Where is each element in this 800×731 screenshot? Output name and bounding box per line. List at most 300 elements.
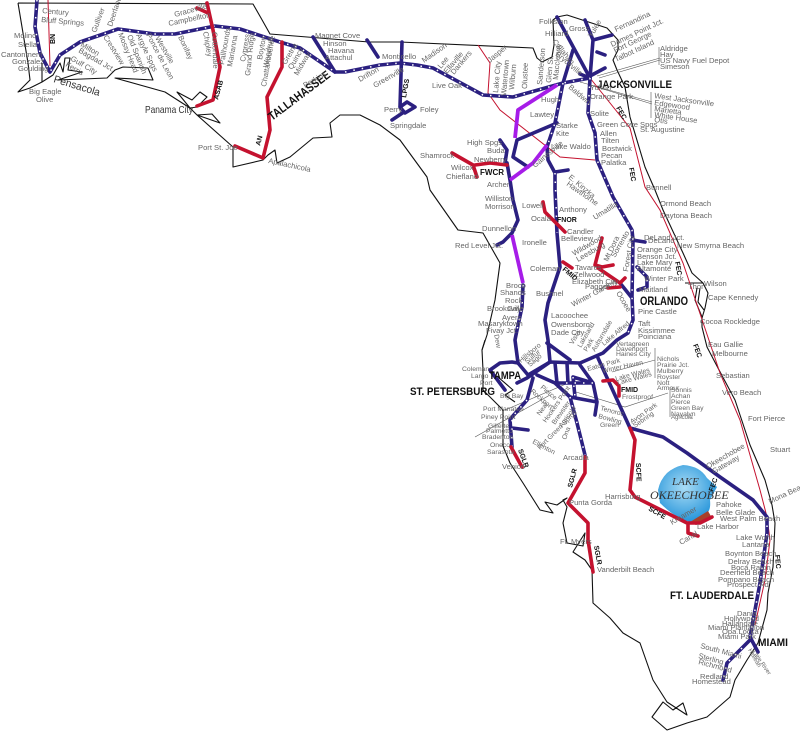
railroad line codes (50, 34, 781, 569)
central and east coast station labels: Forest City (621, 234, 636, 272)
north florida station labels: Lake Waldo (551, 142, 591, 151)
tampa area station labels: Rockport (529, 388, 554, 411)
central and east coast station labels: Elizabeth City (572, 277, 619, 286)
central and east coast station labels: Sorrento (609, 229, 631, 259)
north florida station labels: Sanderson (535, 48, 547, 85)
central and east coast station labels: Lake Harbor (697, 522, 739, 531)
panhandle station labels: Hinson (323, 39, 347, 48)
north florida station labels: Owensboro (551, 320, 590, 329)
tampa area station labels: Sago (527, 353, 544, 369)
tampa area station labels: Lake Alfred (601, 320, 632, 348)
north florida station labels: Olustee (520, 63, 530, 89)
tampa area station labels: Sulfur (524, 348, 542, 366)
central and east coast station labels: Pagget (585, 282, 610, 291)
central and east coast station labels: Bunnell (646, 183, 672, 192)
north florida station labels: Fernandina (613, 9, 652, 34)
railroad line codes: SCFE (634, 463, 642, 482)
north florida station labels: Lacoochee (551, 311, 588, 320)
north florida station labels: Ironelle (522, 238, 547, 247)
central and east coast station labels: Pine Castle (638, 307, 677, 316)
north florida station labels: Ellaville (442, 50, 465, 75)
north florida station labels: Broco (506, 281, 526, 290)
north florida station labels: Pecan (601, 151, 623, 160)
tampa area station labels: Achan (671, 393, 690, 400)
railroad line codes: FMID (561, 266, 578, 283)
central and east coast station labels: Gateway (710, 453, 741, 476)
panhandle station labels: Port St. Joe (198, 143, 238, 152)
central and east coast station labels: Cape Kennedy (708, 293, 758, 302)
central and east coast station labels: Cocoa Rockledge (700, 317, 760, 326)
tampa area station labels: Vertagreen (616, 341, 649, 348)
secondary city labels: Panama City (145, 104, 194, 116)
north florida station labels: Baldwin (567, 83, 593, 107)
central and east coast station labels: Prospect Rd (727, 580, 769, 589)
tampa area station labels: Sebring (632, 410, 656, 430)
panhandle station labels: Milton (79, 40, 101, 58)
north florida station labels: Lake City (491, 61, 503, 93)
central and east coast station labels: Belle Glade (716, 508, 755, 517)
central and east coast station labels: Kreamer (668, 504, 699, 527)
lake okeechobee label: LAKE (671, 476, 699, 488)
central and east coast station labels: Boynton Beach (725, 549, 777, 558)
panhandle station labels: Attachul (325, 53, 353, 62)
central and east coast station labels: Dania (737, 609, 758, 618)
tampa area station labels: Winter Haven (602, 360, 644, 375)
central and east coast station labels: Zellwood (574, 270, 604, 279)
aldridge and west jacksonville label lists: Aldridge (660, 44, 688, 53)
tampa area station labels: Ona (561, 426, 572, 441)
lake okeechobee (658, 465, 717, 522)
north florida station labels: Bryceville (554, 50, 584, 77)
central and east coast station labels: Winter Park (644, 274, 684, 283)
north florida station labels: Talbot Island (613, 38, 655, 64)
north florida station labels: Dunnellon (482, 224, 516, 233)
lake okeechobee label (650, 476, 729, 502)
tampa area station labels: Green Bay (671, 405, 704, 412)
north florida station labels: Fort George (612, 29, 653, 55)
tampa area station labels: Ellenton (531, 439, 556, 456)
panhandle station labels: Crestview (101, 33, 127, 67)
tampa area station labels: Agricola (558, 405, 578, 429)
north florida station labels: Allen (600, 129, 617, 138)
central and east coast station labels: Hialeah (746, 648, 762, 669)
north florida station labels: Archer (487, 180, 510, 189)
purple tracks (510, 85, 557, 283)
central and east coast station labels: Harrisburg (605, 492, 640, 501)
north florida station labels: Belleview (561, 234, 594, 243)
tampa area station labels: Nott (657, 380, 670, 387)
central and east coast station labels: Daytona Beach (660, 211, 712, 220)
central and east coast station labels: Orange City (637, 245, 678, 254)
panhandle station labels: Goulding (18, 64, 48, 73)
panhandle station labels: Century (42, 6, 69, 17)
north florida station labels: Springdale (390, 121, 426, 130)
panhandle station labels: Cantonment (1, 50, 43, 59)
railroad line codes: ASAB (213, 80, 225, 101)
panhandle station labels: Gulf City (69, 54, 99, 76)
tampa area station labels: Bowling (597, 413, 622, 426)
tampa area station labels: Nayalyn (671, 411, 696, 418)
north florida station labels: Drifton (356, 65, 380, 84)
north florida station labels: Dade City (551, 328, 585, 337)
north florida station labels: Green Cove Spgs (597, 120, 658, 129)
north florida station labels: Orange Park (590, 92, 633, 101)
central and east coast station labels: Ormond Beach (660, 199, 711, 208)
tampa area station labels: Nichols (657, 356, 680, 363)
central and east coast station labels: Ft. Myers (560, 537, 592, 546)
railroad line codes: FMID (621, 387, 638, 394)
panhandle station labels: Cypress (238, 33, 252, 62)
panhandle station labels: Argyle Spgs (134, 32, 160, 73)
central and east coast station labels: Taft (638, 319, 651, 328)
major city labels (265, 68, 788, 649)
panhandle station labels: Graceville (173, 1, 208, 19)
central and east coast station labels: Miami Plantation (708, 623, 764, 632)
tampa area station labels: Big Bay (500, 393, 524, 400)
north florida station labels: Yulee (586, 18, 603, 39)
central and east coast station labels: Umatilla (591, 199, 620, 222)
central and east coast station labels: Punta Gorda (569, 498, 613, 507)
aldridge and west jacksonville label lists: Simeson (660, 62, 690, 71)
panhandle station labels (1, 0, 360, 174)
tampa area station labels: Largo (471, 373, 489, 380)
major city labels: FT. LAUDERDALE (670, 590, 754, 602)
panhandle station labels: Perkins (302, 69, 328, 90)
panhandle station labels: Westville (153, 34, 176, 65)
panhandle station labels: Olive (36, 95, 53, 104)
central and east coast station labels: Hallandale (722, 619, 758, 628)
tampa bay shoreline (482, 340, 515, 402)
tampa area station labels: Dew (492, 334, 502, 349)
central and east coast station labels: Vanderbilt Beach (597, 565, 654, 574)
central and east coast station labels (502, 183, 800, 686)
tampa area station labels: Pierce (671, 399, 690, 406)
tampa area station labels: Pierce (539, 384, 558, 402)
tampa area station labels: Fort Green Sprgs (536, 409, 579, 451)
central and east coast station labels: Fort Pierce (748, 414, 785, 423)
north florida station labels: Anthony (559, 205, 587, 214)
tampa area station labels: Vista (569, 329, 582, 346)
panhandle station labels: Quincy (286, 46, 306, 71)
north florida station labels: Lee (436, 55, 451, 70)
tampa area station labels: Park (583, 337, 596, 353)
major city labels: MIAMI (758, 637, 788, 649)
north florida station labels: Macclenny (551, 43, 563, 80)
red tracks (197, 3, 712, 572)
panhandle station labels: Gulliver (89, 6, 107, 34)
leader lines (475, 47, 670, 437)
central and east coast station labels: Pompano Beach (718, 575, 774, 584)
secondary city labels: Pensacola (52, 73, 102, 99)
north florida station labels: Rock (505, 296, 523, 305)
panhandle station labels: Old Spanish (125, 33, 149, 75)
tampa area station labels: Mulberry (657, 368, 684, 375)
panhandle station labels: Boyton (255, 35, 268, 60)
major city labels: ORLANDO (640, 294, 688, 308)
muck area south of lake (690, 511, 712, 525)
railroad line codes: FEC (773, 555, 781, 569)
panhandle station labels: Gretna (280, 41, 300, 66)
railroad line codes: SGLR (516, 448, 529, 469)
aldridge and west jacksonville label lists (654, 44, 730, 126)
central and east coast station labels: Winter Garden (570, 278, 618, 309)
north florida station labels: Lowell (522, 201, 544, 210)
north florida station labels: Jasper (486, 43, 509, 65)
railroad line codes: SCFE (647, 506, 667, 521)
major city labels: JACKSONVILLE (597, 79, 672, 91)
railroad line codes: BN (50, 34, 57, 44)
north florida station labels: Glen St. (544, 55, 555, 83)
north florida station labels: Monticello (382, 52, 416, 61)
north florida station labels: Morrison (485, 202, 515, 211)
railroad line codes: FEC (627, 167, 636, 182)
panhandle station labels: Cottondale (210, 32, 220, 69)
panhandle station labels: Bagdad Jct. (77, 46, 116, 74)
panhandle station labels: Magnet Cove (315, 31, 360, 40)
north florida station labels: Watertown (499, 60, 511, 96)
north florida station labels: Hugh (541, 95, 559, 104)
railroad line codes: FEC (691, 343, 702, 359)
central and east coast station labels: Pahoke (716, 500, 742, 509)
tampa area station labels: Piney Point (481, 414, 515, 421)
railroad line codes: FEC (673, 261, 682, 276)
north florida station labels: Masaryktown (478, 319, 523, 328)
tampa area station labels: Sarasota (487, 449, 514, 456)
tampa area station labels: Eaton Park (587, 357, 622, 373)
central and east coast station labels: Hollywood (724, 614, 759, 623)
railroad line codes: FEC (708, 477, 720, 493)
central and east coast station labels: Maitland (639, 285, 668, 294)
panhandle station labels: Marianna (225, 34, 240, 67)
central and east coast station labels: Thor (688, 282, 704, 291)
north florida station labels: Hilliard (545, 29, 568, 38)
railroad line codes: SGLR (592, 545, 602, 566)
tampa area station labels: Lakeland (577, 321, 597, 349)
north florida station labels: Wilburn (507, 64, 518, 90)
tampa area station labels: Palmetto (486, 428, 513, 435)
aldridge and west jacksonville label lists: Hay (660, 50, 674, 59)
tampa area station labels: Frostproof (622, 394, 653, 401)
central and east coast station labels: South Miami (699, 641, 743, 661)
panhandle station labels: Gonzalez (12, 57, 44, 66)
central and east coast station labels: Wildwood (570, 233, 604, 258)
central and east coast station labels: Eau Gallie (708, 340, 743, 349)
central and east coast station labels: Kissimmee (638, 326, 675, 335)
tampa area station labels: Hillsboro (518, 342, 543, 365)
central and east coast station labels: Lake Mary (637, 258, 673, 267)
railroad line codes: FNOR (557, 217, 577, 224)
secondary city labels (52, 73, 194, 116)
central and east coast station labels: Altamonte (637, 264, 671, 273)
panhandle station labels: Bluff Springs (41, 15, 85, 28)
north florida station labels: Ayers (502, 313, 521, 322)
aldridge and west jacksonville label lists: White House (654, 110, 698, 125)
railroad line codes: AN (255, 135, 265, 147)
tampa area station labels: Agricola (671, 415, 693, 421)
central and east coast station labels: Ocoee (614, 290, 633, 313)
central and east coast station labels: Little River (750, 650, 772, 676)
north florida station labels: Chiefland (446, 172, 478, 181)
panhandle station labels: Chattahoochee (259, 35, 277, 87)
north florida station labels: Live Oak (432, 81, 462, 90)
tampa area station labels: Armour (657, 385, 680, 392)
panhandle station labels: Mossy Head (116, 31, 140, 74)
central and east coast station labels: DeLand (648, 236, 675, 245)
tampa area station labels: Tenoroc (599, 405, 625, 418)
central and east coast station labels: Tavares (575, 263, 602, 272)
aldridge and west jacksonville label lists: Otis (654, 115, 669, 126)
north florida station labels: Newberry (474, 155, 507, 164)
north florida station labels: Shamrock (420, 151, 454, 160)
north florida station labels: Perry (384, 105, 402, 114)
panhandle station labels: Chipley (201, 31, 214, 57)
central and east coast station labels: Sebastian (716, 371, 750, 380)
north florida station labels: High Spgs (467, 138, 502, 147)
tampa area station labels: Hookers Point (542, 385, 572, 424)
panhandle station labels: Ferris (64, 60, 85, 78)
major city labels: TAMPA (489, 370, 521, 382)
central and east coast station labels: Wilson (704, 279, 727, 288)
tampa area station labels: Bradenton (482, 434, 514, 441)
north florida station labels: Palatka (601, 158, 627, 167)
north florida station labels: Gross (569, 24, 589, 33)
tampa area station labels: Brewster (551, 400, 572, 426)
aldridge and west jacksonville label lists: Edgewood (654, 98, 691, 112)
north florida station labels: Solite (590, 109, 609, 118)
north florida station labels: Bostwick (602, 144, 632, 153)
tampa area station labels: Lake Wales (615, 367, 651, 383)
tampa area station labels: Sonnis (671, 387, 692, 394)
tampa area station labels: Port Manatee (483, 406, 524, 413)
north florida station labels: Shands (500, 288, 526, 297)
north florida station labels: Red Level Jct. (455, 241, 503, 250)
north florida station labels: Tilten (601, 136, 619, 145)
tampa area station labels: Port (480, 380, 493, 387)
north florida station labels: Ocala (531, 214, 552, 223)
central and east coast station labels: Mt Dora (602, 234, 622, 263)
panhandle station labels: Midway (292, 50, 313, 77)
north florida station labels: Wilcox (451, 163, 474, 172)
major city labels: TALLAHASSEE (265, 68, 333, 123)
panhandle station labels: Havana (328, 46, 355, 55)
north florida station labels: St. Augustine (640, 125, 685, 134)
aldridge and west jacksonville label lists: West Jacksonville (654, 91, 715, 108)
central and east coast station labels: Lantana (742, 540, 770, 549)
north florida station labels: Dames Point Jct. (609, 16, 665, 49)
central and east coast station labels: Miami Park (718, 632, 756, 641)
tampa area station labels: Coleman (462, 366, 489, 373)
major city labels: ST. PETERSBURG (410, 386, 495, 398)
panhandle station labels: Woodruff (261, 36, 275, 68)
central and east coast station labels: Sterling (697, 651, 725, 667)
tampa area station labels: Royster (657, 374, 681, 381)
north florida station labels: Madison (420, 41, 449, 65)
north florida station labels: Buda (487, 146, 506, 155)
tampa area station labels: Davenport (616, 346, 647, 353)
tampa area station labels: Prairie Jct. (657, 362, 689, 369)
north florida station labels: Lawtey (530, 110, 554, 119)
central and east coast station labels: West Palm Beach (720, 514, 780, 523)
north florida station labels: E. Kinzka (567, 173, 598, 201)
central and east coast station labels: DeLand Jct. (644, 233, 685, 242)
central and east coast station labels: Canal (678, 529, 699, 547)
cape canaveral lagoons (42, 63, 704, 317)
north florida station labels: Greenville (372, 65, 406, 90)
north florida station labels: Callahan (550, 38, 577, 66)
north florida station labels: Starke (556, 121, 578, 130)
north florida station labels: Folkston (539, 17, 568, 26)
tampa area station labels (462, 319, 704, 456)
railroad line codes: FWCR (480, 168, 504, 177)
central and east coast station labels: Benson Jct. (637, 252, 677, 261)
central and east coast station labels: Arcadia (563, 453, 590, 462)
north florida station labels: Yukon (590, 83, 611, 92)
central and east coast station labels: Opa Locka (722, 627, 760, 636)
railroad line codes: LPGS (401, 78, 411, 98)
north florida station labels: Foley (420, 105, 439, 114)
panhandle station labels: Grand Ridge (243, 32, 256, 76)
north florida station labels: Dankers (449, 49, 474, 76)
north florida station labels: Gay (507, 304, 521, 313)
panhandle station labels: Molino (14, 31, 36, 40)
central and east coast station labels: Leesburg (574, 240, 606, 264)
central and east coast station labels: Redland (700, 672, 728, 681)
tampa area station labels: Gillette (488, 423, 509, 430)
north florida station labels: Hawthorne (565, 179, 600, 208)
railroad line codes: SGLR (567, 468, 579, 489)
tampa area station labels: Green (600, 422, 619, 429)
north florida station labels (356, 9, 685, 337)
central and east coast station labels: Homestead (692, 677, 731, 686)
panhandle station labels: Ponce de Leon (144, 32, 176, 81)
central and east coast station labels: Poinciana (638, 332, 672, 341)
central and east coast station labels: Melbourne (712, 349, 748, 358)
tampa area station labels: Auburndale (591, 319, 614, 353)
panhandle station labels: Bonifay (176, 34, 195, 61)
panhandle station labels: Pallhounds (217, 27, 233, 65)
tampa area station labels: Neal (536, 401, 550, 417)
railroad line codes: FEC (614, 106, 627, 121)
central and east coast station labels: Lake Worth (736, 533, 775, 542)
aldridge and west jacksonville label lists: US Navy Fuel Depot (660, 56, 730, 65)
tampa area station labels: Avon Park (629, 402, 659, 426)
central and east coast station labels: Okeechobee (704, 441, 746, 471)
north florida station labels: Kite (556, 129, 569, 138)
tampa area station labels: Oneco (490, 442, 510, 449)
central and east coast station labels: Delray Beach (728, 557, 774, 566)
north florida station labels: Brooksville (487, 304, 524, 313)
north florida station labels: Coleman (530, 264, 560, 273)
central and east coast station labels: Deerfield Beach (720, 568, 774, 577)
panhandle station labels: Campbellton (168, 10, 211, 28)
central and east coast station labels: Richmond (697, 657, 733, 675)
tampa area station labels: Haines City (616, 351, 651, 358)
tampa area station labels: Lake Wales (617, 371, 653, 387)
central and east coast station labels: New Smyrna Beach (677, 241, 744, 250)
central and east coast station labels: Venice (502, 462, 525, 471)
aldridge and west jacksonville label lists: Marietta (654, 104, 683, 117)
red thin FEC and line (48, 0, 770, 625)
central and east coast station labels: Stuart (770, 445, 791, 454)
north florida station labels: Bushnel (536, 289, 564, 298)
lake okeechobee label: OKEECHOBEE (650, 488, 729, 502)
panhandle station labels: Stella (18, 40, 38, 49)
north florida station labels: Gainesville (531, 139, 565, 170)
north florida station labels: Williston (485, 194, 513, 203)
panhandle station labels: Big Eagle (29, 87, 62, 96)
central and east coast station labels: Boca Raton (731, 563, 771, 572)
panhandle station labels: Apalachicola (268, 156, 312, 174)
